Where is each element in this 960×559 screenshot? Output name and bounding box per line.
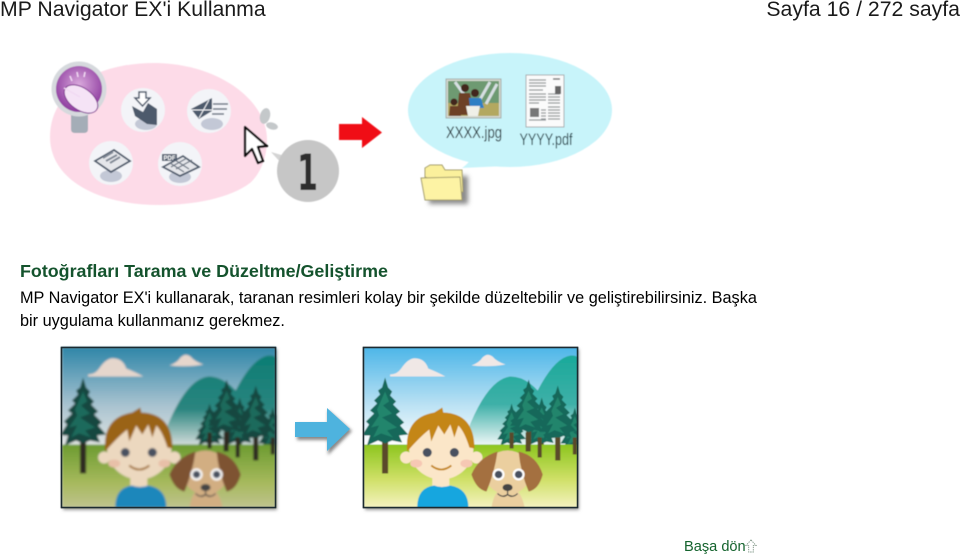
file name: YYYY.pdf: YYYY.pdf [520,130,573,149]
icon: mouse cursor [245,127,267,163]
section heading: Fotoğrafları Tarama ve Düzeltme/Geliştirme [20,261,388,281]
before and after comparison [60,346,581,512]
sharpened result photo [362,348,589,510]
icon: document scan [89,141,133,185]
pink bubble [50,63,267,205]
description text: bir uygulama kullanmanız gerekmez. [20,312,285,330]
blue arrow [295,408,352,455]
click droplets [258,107,279,131]
icon: PDF document [158,142,202,186]
description text [20,289,757,330]
icon: yellow folder [421,165,468,204]
pink bubble with application icons [50,53,612,205]
step number 1 badge: 1 [297,144,318,202]
icon: download to folder [121,88,165,132]
step number 1 badge [271,140,339,202]
file name: XXXX.jpg: XXXX.jpg [446,123,502,142]
red arrow [339,117,382,148]
blue bubble with saved files [408,53,612,168]
PDF page thumbnail [526,75,564,127]
photo thumbnail [446,79,501,118]
blurred original photo [60,348,287,510]
back to top link: Başa dön [684,539,746,555]
scan to file illustration [50,52,612,208]
icon: PDF document: PDF [164,156,176,162]
description text: MP Navigator EX'i kullanarak, taranan resimleri kolay bir şekilde düzeltebilir ve geliştirebilirsiniz. Başka [20,289,757,307]
icon: purple mouse button [52,62,106,133]
icon: envelope send [187,89,231,133]
